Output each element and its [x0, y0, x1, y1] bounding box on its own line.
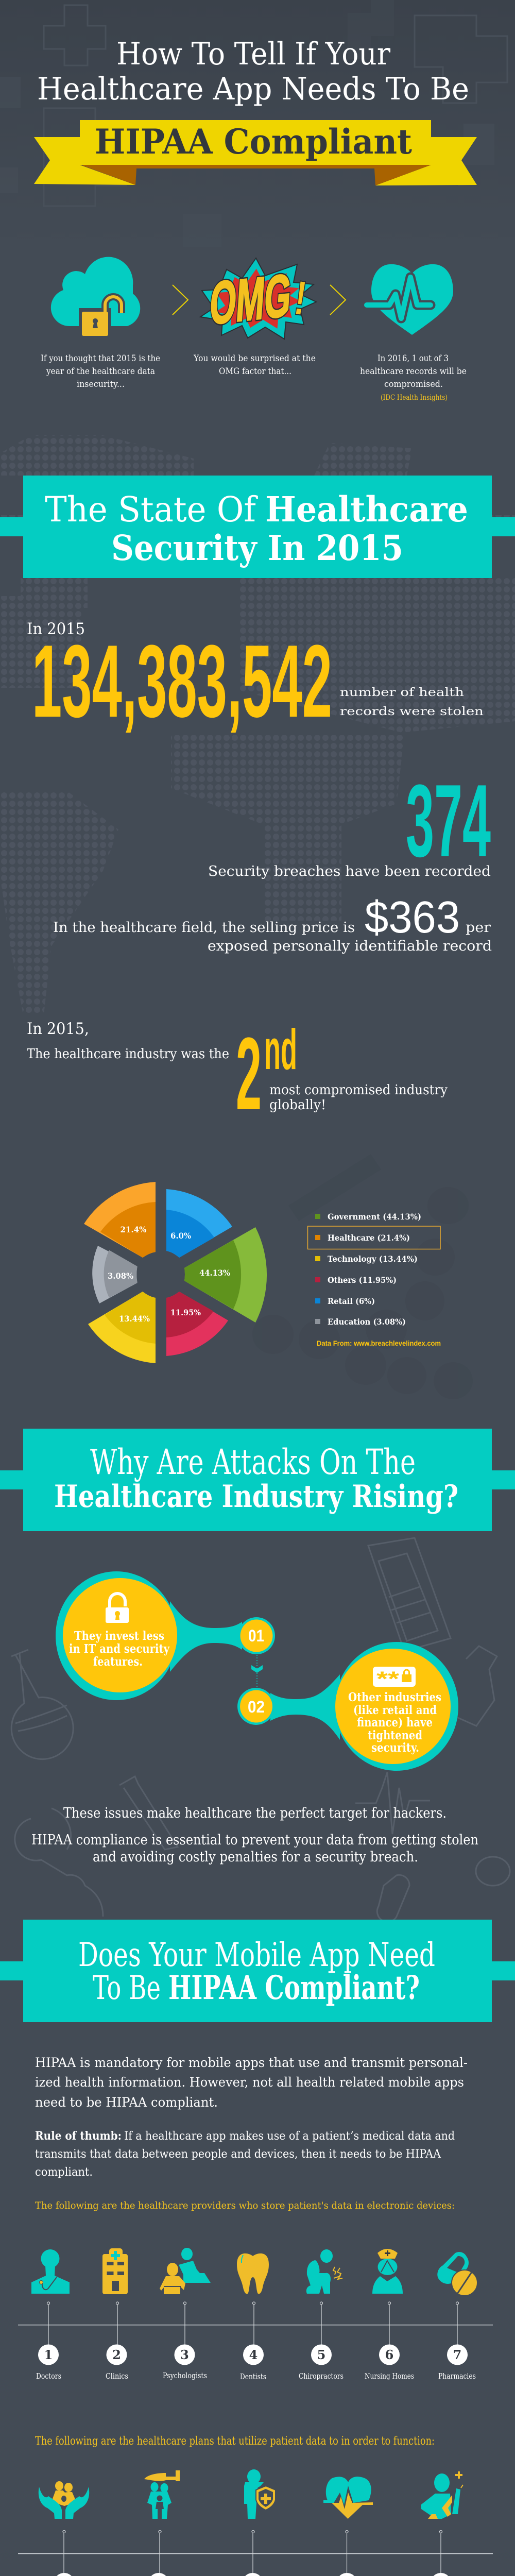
- icon: man with shield: [244, 2469, 276, 2519]
- icon: person with injured arm: [421, 2471, 463, 2519]
- icon: OMG comic burst: !: [290, 270, 311, 326]
- pie chart: industries compromised: [84, 1182, 267, 1363]
- text: HIPAA is mandatory: HIPAA is mandatory for mobile apps that use and transmit personal-: [35, 2055, 468, 2070]
- chart legend: Education (3.08%): [328, 1317, 406, 1327]
- caption 1: insecurity...: [77, 379, 125, 389]
- reason 01: invest less: 01: [248, 1626, 264, 1645]
- ribbon: HIPAA Compliant: HIPAA Compliant: [95, 122, 412, 162]
- caption 1: year of the healthcare data: [46, 366, 155, 377]
- reason 02: other industries: **: [376, 1668, 400, 1690]
- text: rule of thumb: transmits that data between people and devices, then it needs to be HIPAA: [35, 2148, 441, 2161]
- reason 02: other industries: [237, 1642, 458, 1771]
- stat: 374 breaches: [208, 764, 491, 879]
- caption 3: In 2016, 1 out of 3: [377, 353, 449, 364]
- title: Healthcare App Needs To Be: [37, 71, 469, 107]
- timeline: providers: [18, 2302, 493, 2381]
- text: rule of thumb: If a healthcare app makes use of a patient’s medical data and: [124, 2130, 455, 2143]
- timeline: providers: Chiropractors: [299, 2371, 344, 2381]
- icon: OMG comic burst: [200, 258, 316, 339]
- chart legend: [308, 1212, 441, 1347]
- timeline: providers: 1: [44, 2347, 53, 2362]
- pie chart: industries compromised: 11.95%: [170, 1308, 201, 1317]
- stat: 2nd most compromised: In 2015,: [27, 1020, 89, 1038]
- icon: protected family: [144, 2470, 180, 2519]
- heading panel: does your app need: [0, 1920, 515, 2022]
- timeline: plans: [18, 2531, 493, 2576]
- reason 02: other industries: security.: [371, 1741, 419, 1755]
- heading panel: state of healthcare security: Healthcare: [265, 489, 468, 530]
- caption 3: healthcare records will be: [360, 366, 467, 377]
- text: rule of thumb: compliant.: [35, 2166, 93, 2179]
- pie chart: industries compromised: 21.4%: [121, 1225, 146, 1234]
- caption 3: (IDC Health Insights): [381, 394, 448, 402]
- chart legend: Data From: www.breachlevelindex.com: [317, 1339, 441, 1347]
- chart legend: Healthcare (21.4%): [328, 1233, 410, 1243]
- stat: 2nd most compromised: 2: [236, 1016, 262, 1131]
- reason 02: other industries: (like retail and: [353, 1703, 437, 1717]
- text: rule of thumb: Rule of thumb:: [35, 2129, 122, 2143]
- timeline: providers: Nursing Homes: [365, 2371, 414, 2381]
- caption 1: [41, 353, 160, 389]
- heading panel: state of healthcare security: The State Of: [45, 489, 258, 530]
- text: rule of thumb: [35, 2129, 455, 2179]
- stat: 2nd most compromised: [27, 1016, 448, 1131]
- caption 3: [360, 353, 467, 402]
- timeline: providers: Doctors: [36, 2371, 61, 2381]
- pie chart: industries compromised: 13.44%: [119, 1314, 150, 1324]
- caption 1: If you thought that 2015 is the: [41, 353, 160, 364]
- icon: OMG comic burst: OMG: [208, 261, 294, 337]
- ribbon: HIPAA Compliant: [34, 120, 477, 185]
- reason 02: other industries: finance) have: [357, 1716, 433, 1730]
- arrow: chevron 2: [330, 285, 346, 315]
- icon: heart with ECG: [323, 2477, 373, 2519]
- icon: chiropractor patient: [306, 2249, 342, 2294]
- chart legend: Technology (13.44%): [328, 1254, 418, 1264]
- stat: 134,383,542 records: records were stolen: [340, 705, 484, 718]
- timeline: providers: Dentists: [240, 2372, 266, 2381]
- caption 2: [193, 353, 316, 377]
- chart legend: Government (44.13%): [328, 1212, 421, 1222]
- timeline: providers: 7: [453, 2347, 461, 2362]
- heading panel: why are attacks rising: [0, 1429, 515, 1531]
- icon: nurse: [372, 2249, 403, 2294]
- arrow: chevron 1: [173, 285, 188, 315]
- reason 02: other industries: tightened: [368, 1728, 422, 1742]
- chart legend: Others (11.95%): [328, 1275, 397, 1285]
- timeline: providers: Clinics: [106, 2371, 128, 2381]
- reason 01: invest less: [56, 1571, 275, 1700]
- timeline: providers: 5: [317, 2347, 325, 2362]
- timeline: providers: Psychologists: [163, 2371, 207, 2380]
- text: HIPAA is mandatory: [35, 2055, 468, 2110]
- caption 3: compromised.: [384, 379, 443, 389]
- icon: family in hands: [39, 2481, 89, 2519]
- text: issues summary: and avoiding costly penalties for a security breach.: [93, 1849, 418, 1865]
- heading panel: does your app need: HIPAA Compliant?: [168, 1969, 420, 2007]
- pie chart: industries compromised: 3.08%: [108, 1271, 133, 1281]
- title: [37, 36, 469, 107]
- icon: tooth: [237, 2253, 269, 2294]
- stat: 2nd most compromised: nd: [264, 1018, 297, 1081]
- stat: 374 breaches: Security breaches have been recorded: [208, 863, 491, 879]
- text: HIPAA is mandatory: ized health information. However, not all health related mobile apps: [35, 2075, 464, 2090]
- stat: $363 selling price: In the healthcare field, the selling price is: [53, 920, 355, 936]
- title: How To Tell If Your: [116, 36, 390, 72]
- reason 02: other industries: Other industries: [348, 1690, 441, 1704]
- timeline: providers: 4: [249, 2347, 258, 2362]
- text: HIPAA is mandatory: need to be HIPAA compliant.: [35, 2095, 218, 2110]
- reason 01: invest less: in IT and security: [69, 1642, 170, 1656]
- icon: hospital: [102, 2248, 128, 2294]
- stat: $363 selling price: exposed personally identifiable record: [208, 938, 492, 954]
- caption 2: You would be surprised at the: [193, 353, 316, 364]
- text: issues summary: [31, 1805, 478, 1865]
- caption 2: OMG factor that...: [219, 366, 291, 377]
- text: in 2015: In 2015: [27, 620, 85, 638]
- timeline: providers: 3: [180, 2347, 189, 2362]
- stat: 2nd most compromised: globally!: [269, 1097, 326, 1113]
- heading panel: does your app need: To Be: [93, 1969, 161, 2007]
- icon: doctor: [31, 2249, 70, 2294]
- stat: $363 selling price: $363: [365, 892, 460, 942]
- subheading: healthcare providers: The following are the healthcare providers who store patient's data in electronic devices:: [35, 2200, 455, 2211]
- chart legend: Retail (6%): [328, 1296, 375, 1306]
- icon: cloud with open lock: [51, 257, 140, 338]
- heading panel: why are attacks rising: Why Are Attacks On The: [90, 1442, 416, 1482]
- pie chart: industries compromised: 44.13%: [199, 1268, 230, 1278]
- arrow: dotted connector 01 to 02: [251, 1655, 263, 1688]
- stat: 2nd most compromised: The healthcare industry was the: [27, 1046, 229, 1062]
- stat: 134,383,542 records: number of health: [340, 686, 464, 699]
- timeline: providers: 6: [385, 2347, 393, 2362]
- timeline: providers: 2: [112, 2347, 121, 2362]
- stat: $363 selling price: [53, 892, 492, 954]
- timeline: providers: Pharmacies: [438, 2371, 476, 2381]
- text: issues summary: These issues make healthcare the perfect target for hackers.: [63, 1805, 447, 1821]
- icon: heart with pulse: [367, 264, 453, 335]
- icon: OMG comic burst: OMG: [208, 261, 294, 337]
- heading panel: state of healthcare security: [0, 476, 515, 578]
- icon: pills: [437, 2252, 477, 2296]
- reason 01: invest less: They invest less: [74, 1629, 164, 1643]
- reason 01: invest less: features.: [93, 1655, 143, 1669]
- stat: $363 selling price: per: [466, 920, 491, 936]
- heading panel: state of healthcare security: Security In 2015: [111, 528, 403, 568]
- stat: 2nd most compromised: most compromised industry: [269, 1082, 448, 1098]
- icon: psychologist: [160, 2248, 211, 2294]
- pie chart: industries compromised: 6.0%: [170, 1231, 191, 1241]
- reason 02: other industries: 02: [248, 1698, 265, 1716]
